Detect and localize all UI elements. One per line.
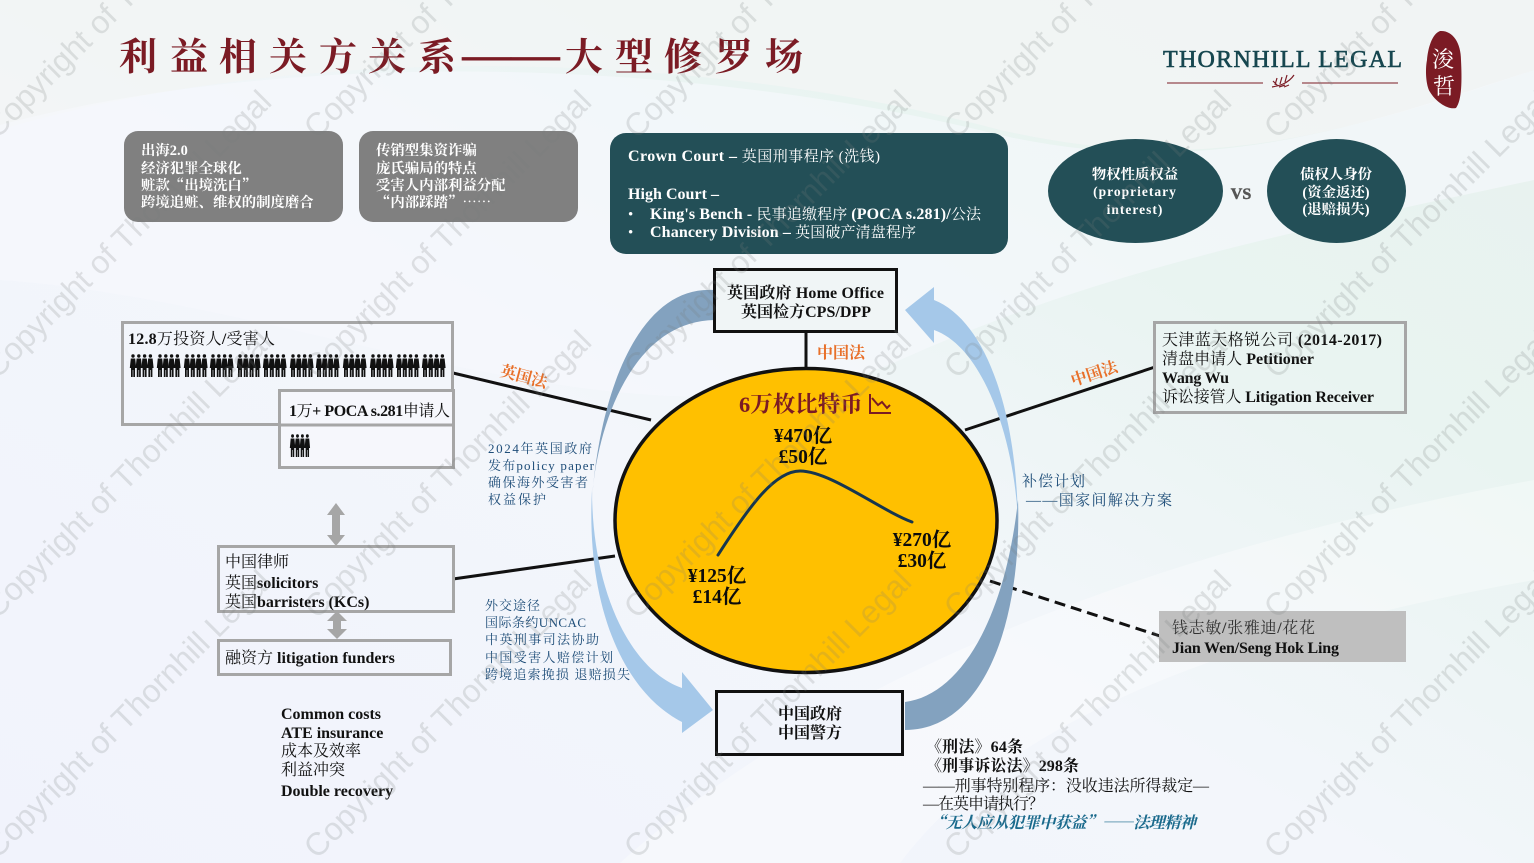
box: China government — [716, 692, 902, 754]
value: peak: £50亿 — [779, 446, 828, 468]
text: cost issues: Common costs — [281, 706, 381, 723]
panel: litigation funders: 融资方 litigation funders — [225, 649, 395, 667]
heading: 6万枚比特币: 6万枚比特币 — [739, 392, 863, 417]
text: diplomatic channels — [485, 598, 630, 682]
panel: Tianjin liquidator: 天津蓝天格锐公司 (2014-2017) — [1162, 330, 1382, 349]
text: compensation scheme — [1022, 473, 1172, 509]
text: 2024 UK policy paper: 确保海外受害者 — [488, 475, 588, 490]
panel: POCA applicants — [279, 390, 454, 468]
seal — [1426, 31, 1461, 108]
icon: rows of people — [130, 354, 446, 377]
panel: courts — [610, 133, 1008, 254]
ellipse: proprietary interest: interest) — [1107, 202, 1163, 217]
value: peak — [774, 425, 833, 468]
box: China government: 中国政府 — [778, 705, 842, 723]
panel: courts: • — [628, 225, 633, 241]
watermark: Copyright of Thornhill Legal — [936, 323, 1238, 625]
central ellipse — [615, 368, 997, 672]
text: criminal law notes — [922, 737, 1210, 833]
value: end: £30亿 — [898, 550, 947, 572]
value: start: £14亿 — [693, 586, 742, 608]
text: diplomatic channels: 中英刑事司法协助 — [485, 632, 599, 647]
panel: 出海2.0: 跨境追赃、维权的制度磨合 — [141, 193, 314, 211]
logo: Thornhill Legal — [1163, 47, 1402, 87]
seal: 哲 — [1433, 74, 1455, 99]
panel: courts: Chancery Division – 英国破产清盘程序 — [650, 223, 916, 241]
ellipse: proprietary interest — [1048, 139, 1223, 243]
panel: courts: King's Bench - 民事追缴程序 (POCA s.281)/公法 — [650, 206, 982, 223]
ellipse: proprietary interest: 物权性质权益 — [1092, 165, 1179, 183]
panel: 传销型集资诈骗: 受害人内部利益分配 — [376, 176, 506, 194]
arrow: dark arc top left — [592, 290, 714, 500]
label: 中国法 top: 中国法 — [817, 343, 867, 362]
text: compensation scheme: 补偿计划 — [1022, 473, 1085, 490]
panel: 传销型集资诈骗: “内部踩踏”…… — [376, 191, 491, 212]
panel: 出海2.0: 出海2.0 — [141, 142, 188, 159]
panel: 出海2.0: 赃款“出境洗白” — [141, 174, 256, 195]
panel: Tianjin liquidator: 清盘申请人 Petitioner — [1162, 350, 1314, 368]
watermark: Copyright of Thornhill Legal — [296, 323, 598, 625]
text: cost issues: 利益冲突 — [281, 761, 345, 779]
text: criminal law notes: “无人应从犯罪中获益”——法理精神 — [930, 810, 1199, 833]
icon: people — [290, 434, 310, 457]
arrow: light arc bottom left — [591, 490, 713, 733]
box: UK government: 英国政府 Home Office — [727, 283, 884, 302]
text: 2024 UK policy paper — [488, 441, 595, 507]
panel: 传销型集资诈骗: 传销型集资诈骗 — [376, 141, 477, 159]
arrow: double vertical lower — [327, 611, 347, 639]
panel: litigation funders — [218, 640, 450, 674]
value: end — [893, 529, 952, 572]
panel: Tianjin liquidator: Wang Wu — [1162, 370, 1229, 387]
text: 2024 UK policy paper: 2024年英国政府 — [488, 441, 592, 456]
text: cost issues: 成本及效率 — [281, 742, 361, 760]
watermark: Copyright of Thornhill Legal — [616, 563, 918, 863]
panel: courts: High Court – — [628, 186, 720, 203]
text: diplomatic channels: 中国受害人赔偿计划 — [485, 650, 613, 665]
watermark: Copyright of Thornhill Legal — [936, 563, 1238, 863]
label: 英国法: 英国法 — [498, 361, 551, 392]
panel: lawyers — [218, 546, 454, 612]
text: diplomatic channels: 跨境追索挽损 退赔损失 — [485, 667, 630, 682]
watermark: Copyright of Thornhill Legal — [296, 563, 598, 863]
ellipse: proprietary interest: (proprietary — [1093, 184, 1177, 199]
watermark: Copyright of Thornhill Legal — [936, 83, 1238, 385]
seal: 浚 — [1432, 47, 1454, 72]
box: UK government — [714, 270, 896, 332]
panel: investors — [122, 322, 452, 424]
panel: defendants: 钱志敏/张雅迪/花花 — [1172, 618, 1315, 637]
arrow: dark arc bottom right — [905, 500, 1018, 730]
ellipse: creditor status: (退赔损失) — [1302, 200, 1370, 218]
value: end: ¥270亿 — [893, 529, 952, 551]
panel: courts: • — [628, 207, 633, 223]
text: criminal law notes: ——刑事特别程序：没收违法所得裁定— — [922, 777, 1210, 795]
panel: 出海2.0: 经济犯罪全球化 — [141, 159, 242, 177]
arrow: double vertical upper — [327, 503, 345, 546]
panel: Tianjin liquidator — [1154, 322, 1406, 412]
text: 2024 UK policy paper: 权益保护 — [488, 492, 546, 507]
line: lawyers to centre — [453, 556, 615, 579]
panel: POCA applicants: 1万+ POCA s.281申请人 — [289, 402, 450, 420]
panel: defendants — [1159, 611, 1406, 662]
curve: value over time — [718, 471, 912, 555]
panel: investors: 12.8万投资人/受害人 — [128, 330, 275, 348]
text: criminal law notes: 《刑法》64条 — [926, 737, 1023, 756]
text: cost issues: Double recovery — [281, 783, 393, 800]
panel: 传销型集资诈骗: 庞氏骗局的特点 — [376, 159, 478, 177]
label: 中国法 right: 中国法 — [1068, 356, 1122, 390]
connector: top box to ellipse — [804, 332, 808, 368]
panel: Tianjin liquidator: 诉讼接管人 Litigation Receiver — [1162, 388, 1374, 406]
value: peak: ¥470亿 — [774, 425, 833, 447]
text: cost issues — [281, 706, 393, 800]
box: China government: 中国警方 — [778, 723, 842, 742]
panel: lawyers: 中国律师 — [225, 553, 289, 571]
icon: falling chart — [870, 394, 891, 413]
panel: courts: Crown Court – 英国刑事程序 (洗钱) — [628, 147, 880, 165]
panel: 出海2.0 — [124, 131, 343, 222]
text: cost issues: ATE insurance — [281, 725, 383, 742]
ellipse: creditor status: (资金返还) — [1302, 183, 1370, 201]
panel: 传销型集资诈骗 — [359, 131, 578, 222]
logo: Thornhill Legal: THORNHILL LEGAL — [1163, 47, 1402, 73]
panel: defendants: Jian Wen/Seng Hok Ling — [1172, 640, 1339, 657]
box: UK government: 英国检方CPS/DPP — [741, 302, 871, 321]
value: start — [688, 565, 747, 608]
watermark: Copyright of Thornhill Legal — [616, 323, 918, 625]
line: dashed to defendants — [990, 581, 1160, 636]
line: liquidator to centre — [965, 367, 1155, 430]
line: top-left investors to centre — [453, 373, 651, 420]
watermark: Copyright of Thornhill Legal — [616, 83, 918, 385]
text: diplomatic channels: 国际条约UNCAC — [485, 615, 586, 630]
panel: lawyers: 英国barristers (KCs) — [225, 592, 369, 611]
text: criminal law notes: 《刑事诉讼法》298条 — [926, 756, 1079, 775]
value: start: ¥125亿 — [688, 565, 747, 587]
text: 2024 UK policy paper: 发布policy paper — [488, 458, 595, 473]
panel: lawyers: 英国solicitors — [225, 573, 318, 592]
ellipse: creditor status: 债权人身份 — [1300, 165, 1373, 183]
text: criminal law notes: —在英申请执行？ — [922, 794, 1044, 813]
arrow: light arc top right — [905, 287, 1018, 530]
title: 利益相关方关系——大型修罗场 — [119, 26, 803, 81]
text: compensation scheme: ——国家间解决方案 — [1025, 492, 1172, 509]
label: vs: VS — [1231, 186, 1251, 203]
text: diplomatic channels: 外交途径 — [485, 598, 540, 613]
watermark: Copyright of Thornhill Legal — [296, 83, 598, 385]
ellipse: creditor status — [1267, 139, 1406, 243]
